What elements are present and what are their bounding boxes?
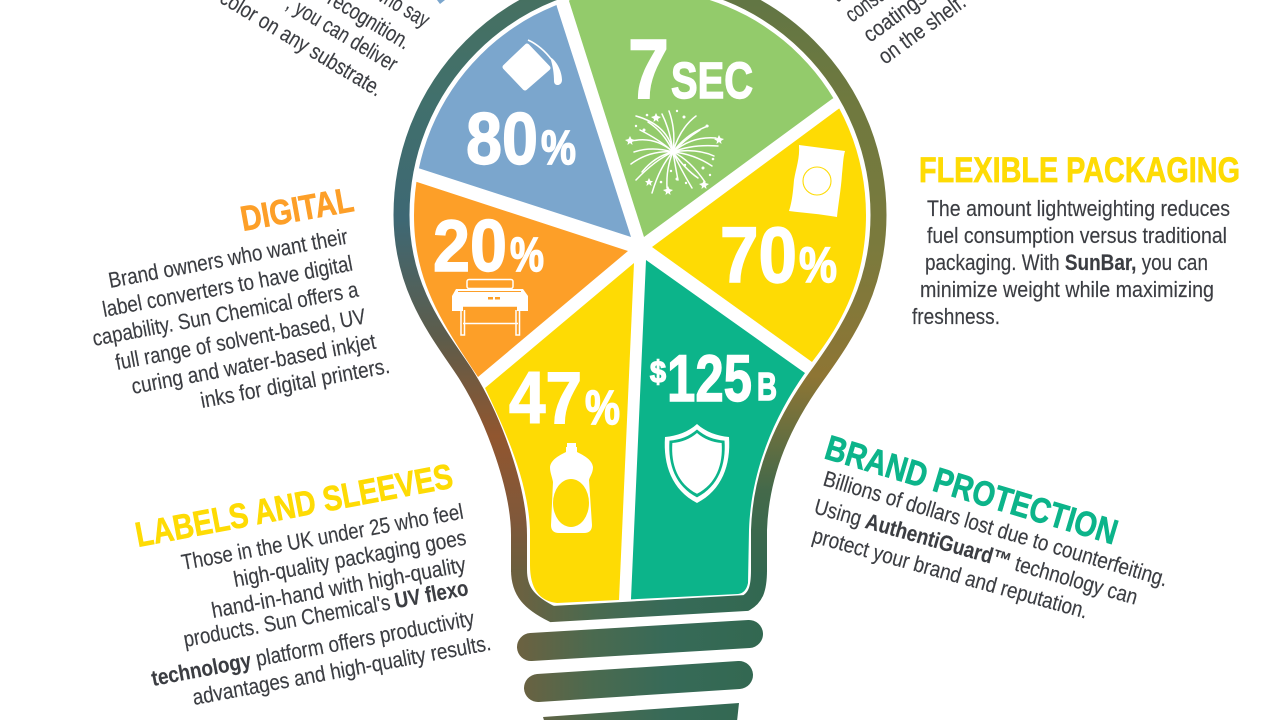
slice: blue 80% (419, 5, 631, 237)
stat: 20%: 20 (433, 206, 507, 287)
stat: $125B: $ (650, 354, 666, 389)
text block: flexible packaging: freshness. (912, 304, 1000, 329)
text block: labels and sleeves: technology platform offers productivity (149, 605, 476, 691)
heading: labels and sleeves: LABELS AND SLEEVES (132, 457, 456, 555)
stat: 80%: % (541, 122, 576, 175)
text block: labels and sleeves: high-quality packaging goes (231, 525, 468, 592)
text block: flexible packaging (912, 196, 1230, 329)
stat: 80%: 80 (466, 99, 538, 180)
pie slices inside bulb (414, 0, 866, 603)
icon: shield (665, 424, 729, 503)
slice: orange 20% (414, 182, 628, 377)
icon: flexible pouch bag (789, 145, 845, 217)
stat: 20%: % (510, 229, 544, 282)
stat: 7 SEC: 7 (628, 22, 669, 116)
text block: flexible packaging: packaging. With SunBar, you can (925, 250, 1208, 275)
stat: 47%: 47 (509, 358, 582, 439)
slice: green 7 sec (568, 0, 834, 237)
slice: yellow 47% (485, 263, 634, 603)
icon: fireworks (625, 110, 724, 195)
text block: digital: curing and water-based inkjet (129, 329, 378, 399)
text block: digital: label converters to have digital (100, 251, 355, 322)
bulb outline (402, 0, 878, 614)
text block: flexible packaging: minimize weight while maximizing (920, 277, 1214, 302)
icon: detergent bottle (550, 443, 593, 533)
text block: top-right clipped copy (825, 0, 970, 69)
stat: $125B: B (757, 366, 777, 409)
icon: wide-format printer (452, 280, 528, 335)
text block: digital: full range of solvent-based, UV (113, 304, 368, 375)
stat: 70%: 70 (720, 210, 797, 299)
text block: labels and sleeves: products. Sun Chemical's UV flexo (181, 575, 470, 652)
slice: teal $125B (631, 260, 805, 600)
heading fragment: top-left (437, 0, 445, 4)
stat: 7 SEC (628, 22, 753, 116)
text block: brand protection: Billions of dollars lost due to counterfeiting. (821, 466, 1171, 591)
text block: labels and sleeves: hand-in-hand with high-quality (209, 552, 468, 623)
text block: labels and sleeves: Those in the UK under 25 who feel (179, 499, 465, 575)
text block: labels and sleeves (149, 499, 493, 710)
heading: brand protection: BRAND PROTECTION (821, 428, 1122, 552)
text block: flexible packaging: fuel consumption versus traditional (927, 223, 1227, 248)
stat: $125B: 125 (667, 341, 752, 415)
text block: digital (90, 224, 392, 413)
stat: 70%: % (799, 237, 837, 293)
text block: labels and sleeves: advantages and high-quality results. (190, 630, 493, 710)
icon: paint can pouring (505, 40, 562, 88)
bulb screw base (531, 634, 749, 720)
text block: digital: Brand owners who want their (106, 224, 350, 293)
heading: digital: DIGITAL (238, 180, 357, 239)
text block: brand protection: protect your brand and reputation. (810, 523, 1091, 623)
stat: 7 SEC: SEC (671, 52, 753, 109)
text block: brand protection: Using AuthentiGuard™ technology can (812, 494, 1141, 610)
slice: yellow 70% (652, 108, 866, 362)
text block: digital: capability. Sun Chemical offers a (90, 277, 361, 351)
text block: flexible packaging: The amount lightweighting reduces (927, 196, 1230, 221)
stat: 47%: % (585, 382, 620, 435)
text block: digital: inks for digital printers. (198, 353, 392, 413)
